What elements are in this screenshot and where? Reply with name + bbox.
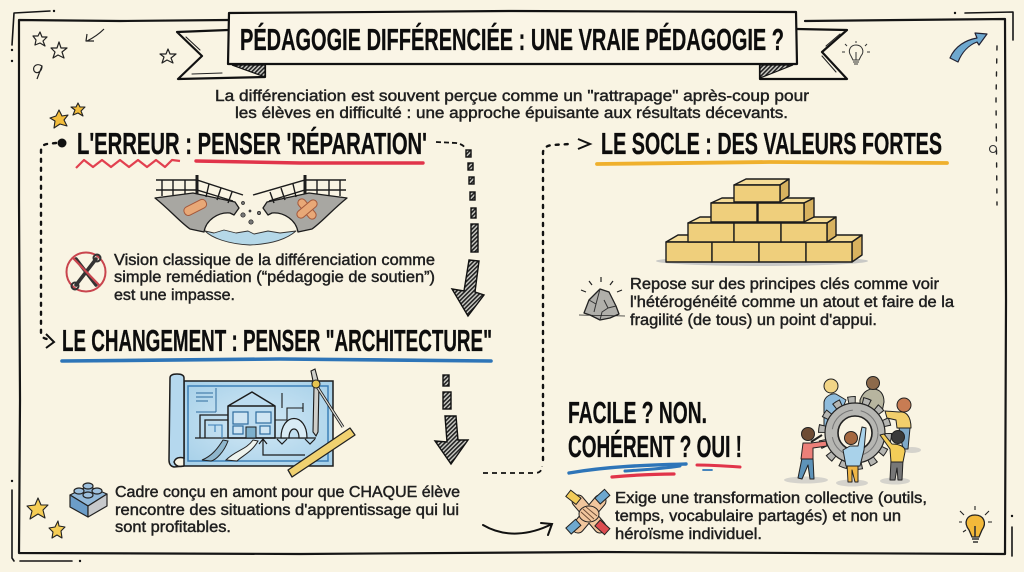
blue underline [62, 359, 491, 361]
illustration: people around gear [784, 376, 921, 486]
text erreur: simple remédiation (“pédagogie de soutien”) [114, 269, 435, 286]
doodle lightbulb top right [842, 41, 870, 64]
intro text [215, 88, 809, 122]
text changement: rencontre des situations d'apprentissage qui lui [115, 502, 459, 519]
title banner [177, 11, 847, 79]
person: top right [860, 376, 884, 412]
text facile [615, 490, 927, 543]
dotted connector erreur to changement [41, 143, 56, 348]
doodle stars top left [33, 29, 176, 79]
heading facile: FACILE ? NON. [568, 395, 707, 430]
illustration: brick pyramid [656, 179, 868, 266]
text erreur: Vision classique de la différenciation comme [114, 252, 435, 269]
text socle: l'hétérogénéité comme un atout et faire de la [630, 294, 954, 311]
text socle: fragilité (de tous) un point d'appui. [630, 312, 877, 329]
text socle [630, 276, 954, 329]
bullet [58, 138, 66, 148]
intro text: les élèves en difficulté : une approche épuisante aux résultats décevants. [235, 105, 788, 122]
yellow underline [597, 162, 947, 164]
person: far right [880, 430, 905, 480]
text changement [115, 484, 460, 536]
icon: no tools [66, 252, 106, 292]
panel: le changement [62, 323, 492, 536]
left ribbon tail [177, 30, 265, 79]
text socle: Repose sur des principes clés comme voir [630, 276, 939, 293]
heading changement: LE CHANGEMENT : PENSER "ARCHITECTURE" [62, 323, 492, 358]
panel: le socle [579, 126, 954, 329]
gold stars [50, 103, 85, 128]
person: right [885, 398, 911, 449]
gear [822, 400, 888, 466]
dotted right margin line [990, 46, 997, 205]
title box [228, 11, 797, 64]
blue curved arrow top right [950, 33, 987, 62]
text facile: héroïsme individuel. [615, 526, 762, 543]
text facile: Exige une transformation collective (outils, [615, 490, 927, 507]
illustration: broken bridge [155, 175, 347, 245]
icon: rock [579, 277, 625, 320]
heading coherent: COHÉRENT ? OUI ! [568, 429, 742, 464]
illustration: blueprint [169, 369, 355, 477]
icon: joined hands [566, 489, 610, 535]
panel: l'erreur [58, 126, 435, 304]
blue and red brush underlines [569, 464, 740, 477]
person: left [798, 428, 827, 479]
text erreur: est une impasse. [114, 287, 235, 304]
text changement: Cadre conçu en amont pour que CHAQUE élève [115, 484, 460, 501]
heading erreur: L'ERREUR : PENSER 'RÉPARATION' [77, 126, 427, 161]
right ribbon tail [760, 29, 847, 79]
person: centre [843, 427, 866, 482]
red underline [196, 161, 423, 163]
text changement: sont profitables. [115, 519, 231, 536]
dashed arrow to facile [435, 375, 468, 464]
icon: gold lightbulb [959, 506, 992, 542]
curved arrow to facile [483, 523, 552, 535]
text facile: temps, vocabulaire partagés) et non un [615, 508, 901, 525]
panel: facile / coherent [566, 376, 927, 543]
person: top left [824, 379, 846, 428]
icon: building block [70, 483, 107, 517]
intro text: La différenciation est souvent perçue comme un "rattrapage" après-coup pour [215, 88, 809, 105]
dashed arrow to changement [436, 142, 484, 316]
text erreur [114, 252, 435, 304]
gold stars bottom left [27, 498, 65, 538]
red wavy underline [76, 160, 180, 168]
dotted connector to le socle [483, 139, 590, 473]
